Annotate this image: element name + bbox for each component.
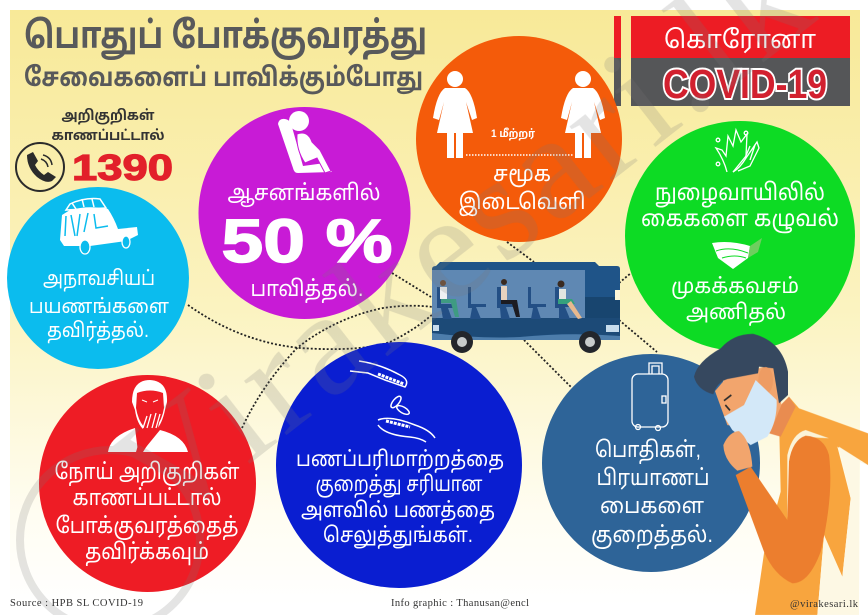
- panel: seats 50 percent: [198, 107, 410, 319]
- panel: seats 50 percent: 50 %: [222, 207, 392, 275]
- eye: [724, 395, 731, 410]
- face: [715, 363, 781, 432]
- strap: [787, 430, 829, 518]
- infographic credit: Info graphic : Thanusan@encl: [391, 598, 529, 609]
- icon: washing hands: [716, 130, 759, 172]
- neck: [769, 397, 796, 437]
- panel: avoid travel when symptoms: காணப்பட்டால்: [72, 485, 222, 510]
- icon: seated person: [278, 111, 332, 173]
- badge COVID-19: COVID-19: [663, 61, 827, 107]
- panel: social distance: 1 மீற்றர்: [491, 128, 535, 141]
- hotline: அறிகுறிகள்: [62, 107, 155, 125]
- panel: reduce luggage: பிரயாணப்: [596, 465, 710, 490]
- panel: hand washing and masks: அணிதல்: [686, 301, 786, 326]
- hotline: 1390: [72, 147, 173, 188]
- arm: [736, 436, 830, 583]
- icon: hands and coins: [350, 361, 435, 442]
- mask: [724, 380, 777, 445]
- title: பொதுப் போக்குவரத்து: [24, 15, 427, 60]
- icon: man coughing: [108, 380, 188, 452]
- panel: reduce cash exchange: செலுத்துங்கள்.: [323, 524, 473, 549]
- bus passengers: [440, 279, 582, 319]
- panel: reduce cash exchange: பணப்பரிமாற்றத்தை: [296, 448, 504, 473]
- panel: avoid unnecessary travel: அநாவசியப்: [43, 268, 155, 292]
- icon: car with luggage: [60, 199, 138, 254]
- bus wheels: [451, 331, 601, 353]
- panel: reduce luggage: பைகளை: [600, 493, 704, 518]
- panel: avoid travel when symptoms: தவிர்க்கவும்: [85, 539, 209, 566]
- panel: avoid unnecessary travel: பயணங்களை: [29, 296, 170, 318]
- panel: reduce cash exchange: அளவில் பணத்தை: [301, 499, 495, 524]
- panel: social distance: [416, 36, 622, 242]
- dotted connectors: [188, 242, 657, 428]
- panel: reduce cash exchange: [276, 342, 522, 588]
- hotline: காணப்பட்டால்: [52, 127, 164, 143]
- ear: [758, 367, 773, 394]
- scarf and torso: [755, 397, 868, 615]
- hair: [694, 334, 788, 403]
- panel: avoid travel when symptoms: போக்குவரத்தைத்: [56, 513, 238, 540]
- panel: reduce cash exchange: குறைத்து சரியான: [316, 473, 483, 498]
- icon: woman left: [433, 71, 477, 158]
- title: சேவைகளைப் பாவிக்கும்போது: [24, 62, 423, 94]
- panel: avoid unnecessary travel: [7, 187, 189, 369]
- panel: hand washing and masks: [625, 121, 855, 351]
- panel: seats 50 percent: பாவித்தல்.: [250, 276, 364, 303]
- handle credit: @virakesari.lk: [790, 599, 859, 610]
- icon: suitcase: [632, 363, 668, 430]
- panel: hand washing and masks: கைகளை கழுவல்: [641, 205, 839, 234]
- icon: mask: [712, 238, 762, 269]
- panel: reduce luggage: குறைத்தல்.: [591, 522, 713, 549]
- panel: avoid travel when symptoms: நோய் அறிகுறிகள்: [54, 459, 240, 486]
- bus seats: [437, 287, 572, 319]
- COVID badge: [614, 16, 850, 107]
- panel: seats 50 percent: ஆசனங்களில்: [228, 180, 380, 208]
- panel: social distance: சமூக: [493, 161, 551, 187]
- panel: reduce luggage: [542, 354, 760, 572]
- hotline: [16, 107, 173, 191]
- hand: [723, 431, 752, 471]
- icon: phone: [16, 143, 64, 191]
- icon: woman right: [561, 71, 605, 158]
- panel: avoid travel when symptoms: [39, 375, 256, 592]
- title: [24, 15, 427, 94]
- panel: social distance: இடைவெளி: [458, 189, 586, 216]
- bus: [432, 262, 620, 353]
- source credit: Source : HPB SL COVID-19: [10, 598, 143, 609]
- badge heading: கொரோனா: [664, 26, 816, 54]
- person coughing: [694, 334, 868, 615]
- panel: hand washing and masks: முகக்கவசம்: [671, 275, 799, 299]
- panel: avoid unnecessary travel: தவிர்த்தல்.: [47, 320, 149, 343]
- panel: hand washing and masks: நுழைவாயிலில்: [655, 179, 825, 208]
- panel: reduce luggage: பொதிகள்,: [595, 437, 701, 464]
